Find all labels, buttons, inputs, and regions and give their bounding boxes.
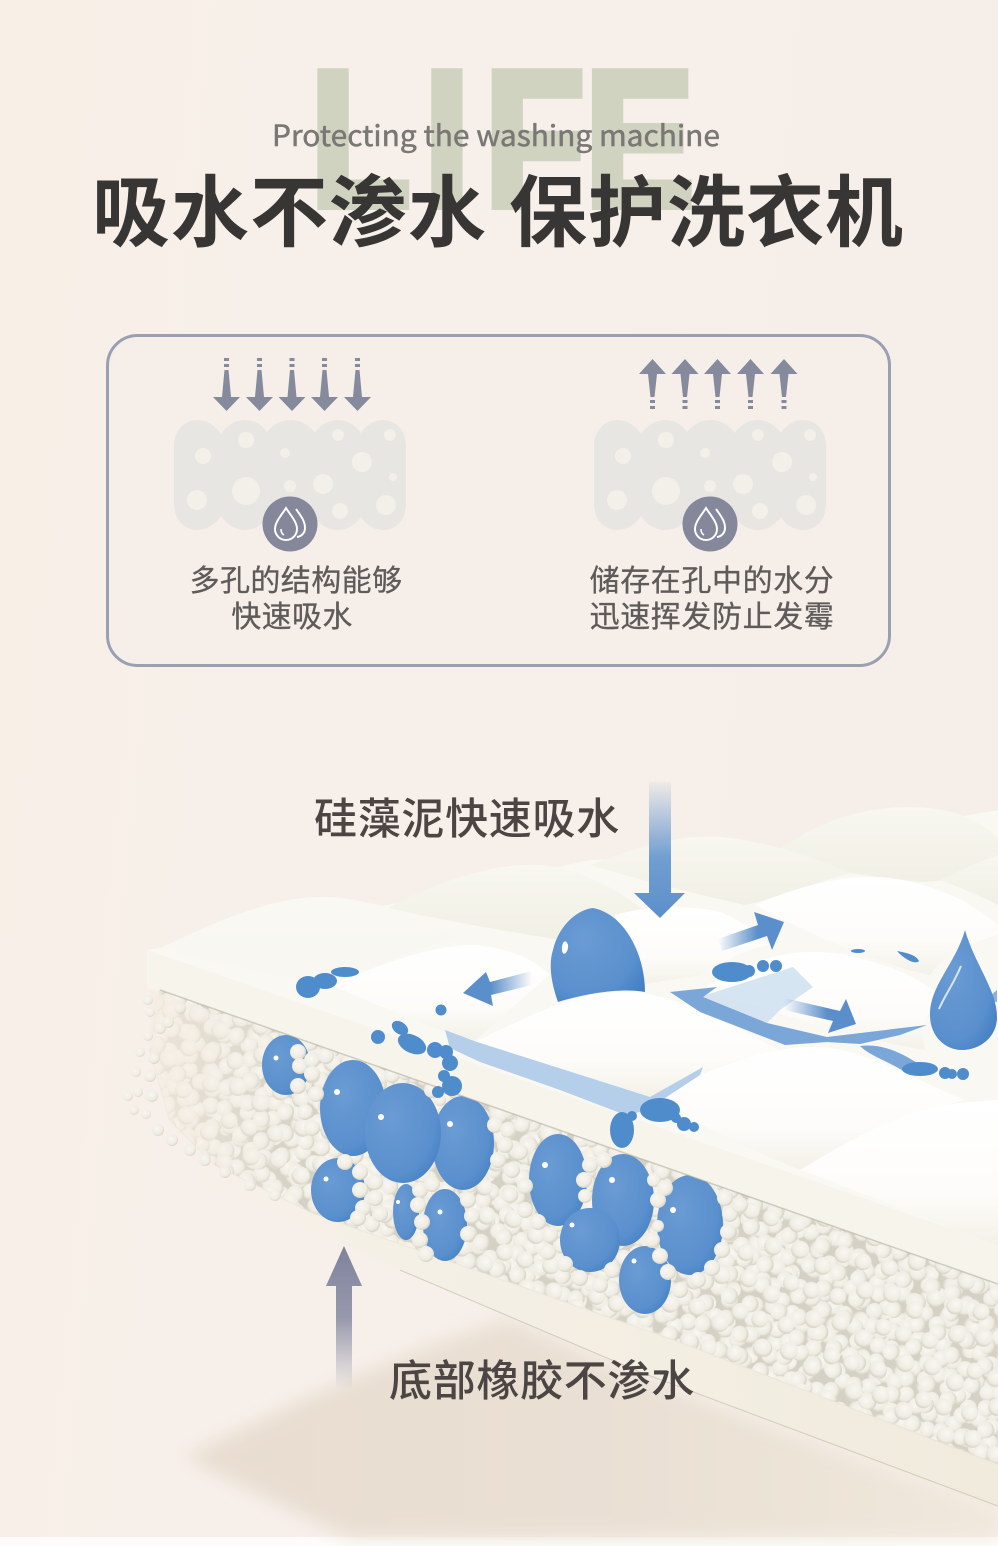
arrow: water spreading lower right [784,998,856,1033]
watermark word LIFE: LIFE [310,31,694,246]
mattress illustration [123,807,998,1510]
subtitle: Protecting the washing machine [272,113,720,155]
arrow: water spreading upper right [718,912,784,951]
quilted top surface [147,807,998,1245]
blue water spheres [262,1035,723,1314]
icon: porous material left [174,420,406,530]
title: 保护洗衣机 [509,169,904,257]
arrow: water spreading left [463,971,532,1006]
icon: down arrows [213,358,371,411]
arrow: water down [634,782,685,918]
label: diatom absorbs: 硅藻泥快速吸水 [314,796,620,844]
icon: up arrows [639,359,798,409]
icon: water drops badge right [682,496,738,552]
water film on surface [445,967,997,1116]
floor shadow [185,1320,998,1537]
diatom bead layer [123,990,998,1464]
text: porous absorbs: 快速吸水 [231,601,353,634]
text: stored water evaporates: 储存在孔中的水分 [590,565,834,598]
title [92,169,904,257]
bottom rubber layer [165,1150,998,1510]
text: porous absorbs: 多孔的结构能够 [190,565,402,598]
icon: water drops badge left [262,496,318,552]
beads over spheres [290,1044,748,1298]
scattered beads at left edge [123,995,281,1201]
large water drop: teardrop [930,930,997,1050]
title: 吸水不渗水 [92,169,487,257]
icon: porous material right [594,420,826,530]
text: stored water evaporates: 迅速挥发防止发霉 [590,601,834,634]
arrow: rubber up [326,1246,362,1390]
quilted pillows [388,807,998,940]
water droplets on surface [296,949,969,1148]
large water drop: egg [551,908,645,1002]
foam top layer side [147,950,998,1284]
text: stored water evaporates [590,565,834,634]
panel: absorption and evaporation [108,336,890,666]
label: rubber waterproof: 底部橡胶不渗水 [389,1358,695,1406]
text: porous absorbs [190,565,402,634]
